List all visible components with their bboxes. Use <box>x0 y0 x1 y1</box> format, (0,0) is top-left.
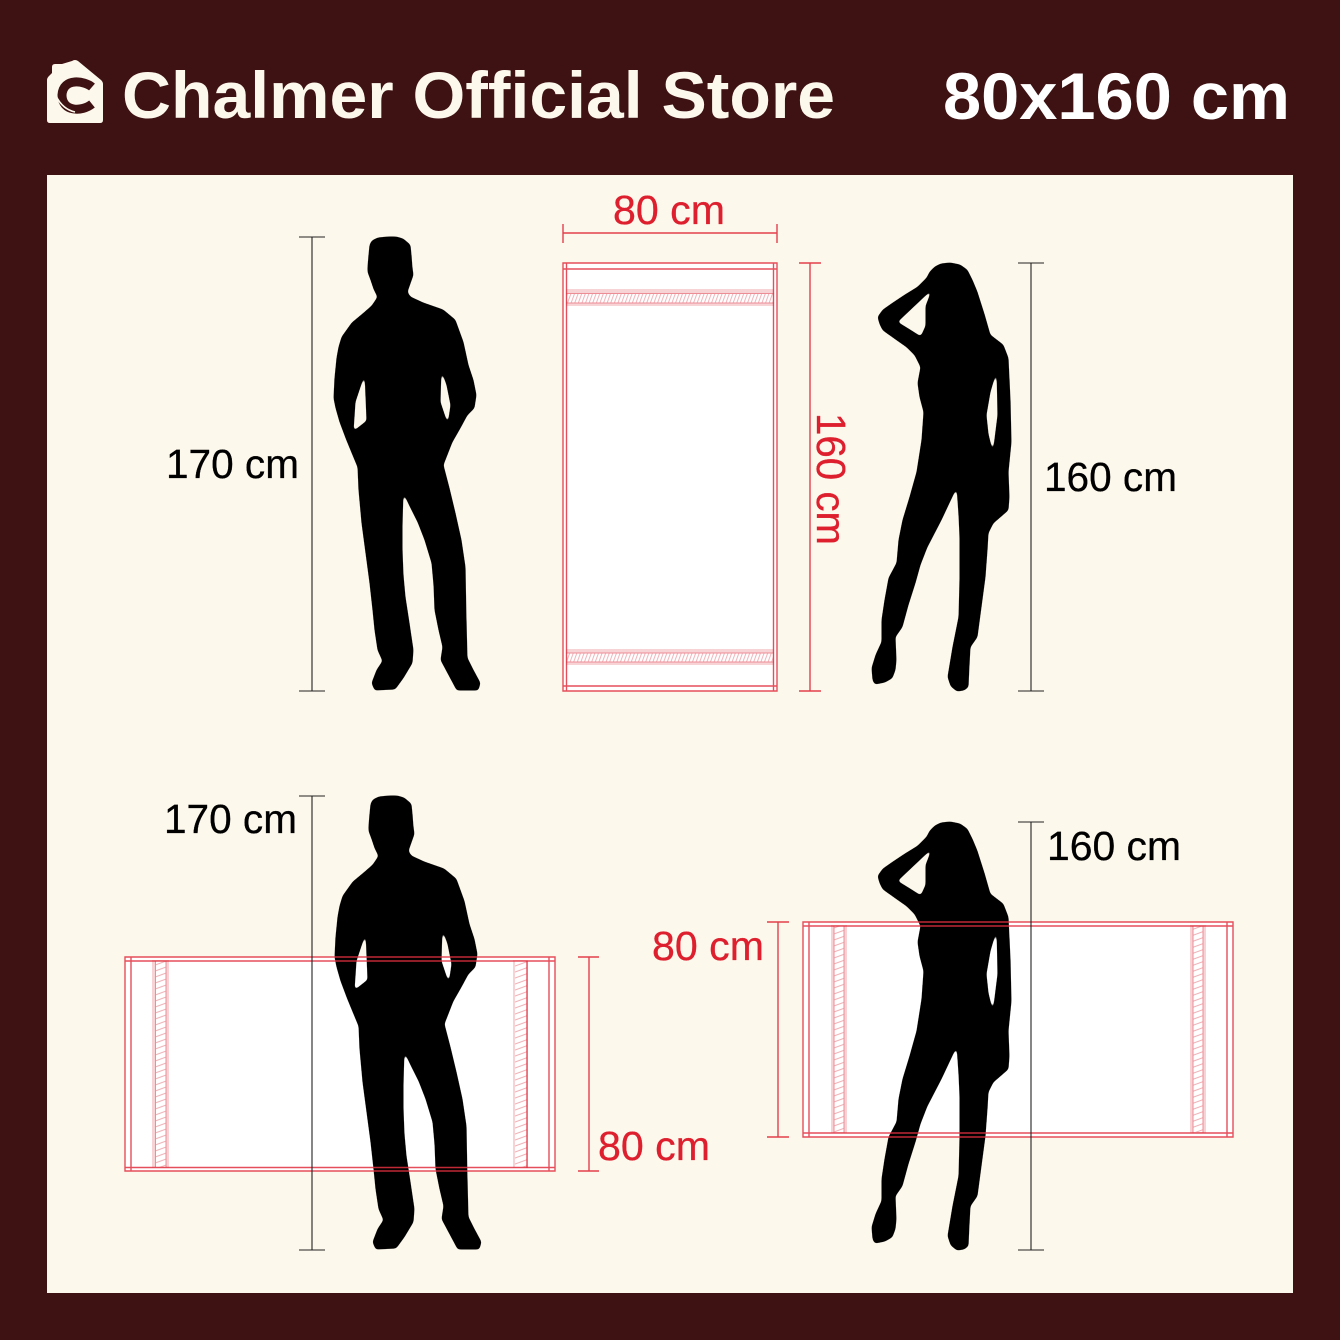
towel width dimension <box>563 224 777 243</box>
woman silhouette <box>872 263 1011 691</box>
left woven band <box>831 925 847 1133</box>
logo: house with C mark <box>47 60 103 123</box>
panel: standing woman with height <box>872 263 1177 691</box>
towel width label: 80 cm <box>613 187 725 233</box>
title: Chalmer Official Store <box>122 58 835 132</box>
panel: standing man with height <box>166 237 480 691</box>
panel: man holding horizontal towel <box>125 796 710 1250</box>
man silhouette <box>335 796 481 1249</box>
towel body <box>125 957 555 1171</box>
towel height label: 80 cm <box>598 1123 710 1169</box>
man height dimension line <box>299 796 325 1250</box>
towel outline <box>803 922 1233 1137</box>
man silhouette <box>334 237 480 690</box>
size heading: 80x160 cm <box>943 59 1290 133</box>
towel height dimension <box>799 263 821 691</box>
man height label: 170 cm <box>166 441 299 487</box>
man height label: 170 cm <box>164 796 297 842</box>
woman height dimension line <box>1018 263 1044 691</box>
towel height dimension <box>578 957 599 1171</box>
towel body <box>803 922 1233 1137</box>
panel: woman holding horizontal towel <box>652 822 1233 1250</box>
top woven band <box>566 289 774 306</box>
towel outline <box>563 263 777 691</box>
towel height label: 160 cm <box>808 413 854 545</box>
right woven band <box>513 960 528 1168</box>
main panel <box>47 175 1293 1293</box>
towel height dimension <box>767 922 789 1137</box>
panel: vertical towel <box>563 187 854 691</box>
woman height label: 160 cm <box>1047 823 1181 869</box>
right woven band <box>1190 925 1206 1133</box>
bottom woven band <box>566 649 774 665</box>
left woven band <box>152 960 169 1168</box>
towel body <box>563 263 777 691</box>
woman height label: 160 cm <box>1044 454 1177 500</box>
man height dimension line <box>299 237 325 691</box>
towel height label: 80 cm <box>652 923 764 969</box>
towel outline <box>125 957 555 1171</box>
woman height dimension line <box>1018 822 1044 1250</box>
woman silhouette <box>872 822 1011 1250</box>
